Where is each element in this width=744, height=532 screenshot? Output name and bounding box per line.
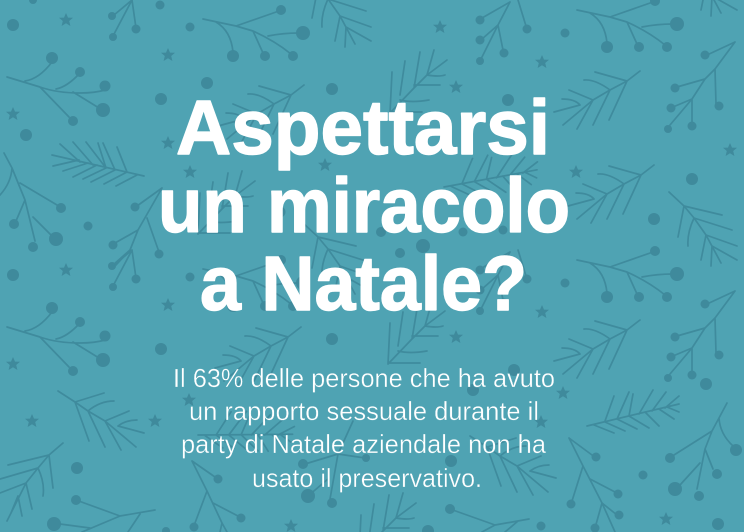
body text [173, 363, 555, 493]
body text: un rapporto sessuale durante il [189, 396, 539, 426]
title [158, 85, 570, 327]
body text: party di Natale aziendale non ha [181, 429, 547, 459]
body text: usato il preservativo. [252, 463, 482, 493]
title: un miracolo [158, 163, 570, 249]
pattern: individual branches [0, 153, 742, 532]
pattern: berry branches [7, 0, 735, 382]
title: Aspettarsi [176, 85, 550, 171]
title: a Natale? [200, 241, 527, 327]
body text: Il 63% delle persone che ha avuto [173, 363, 555, 393]
